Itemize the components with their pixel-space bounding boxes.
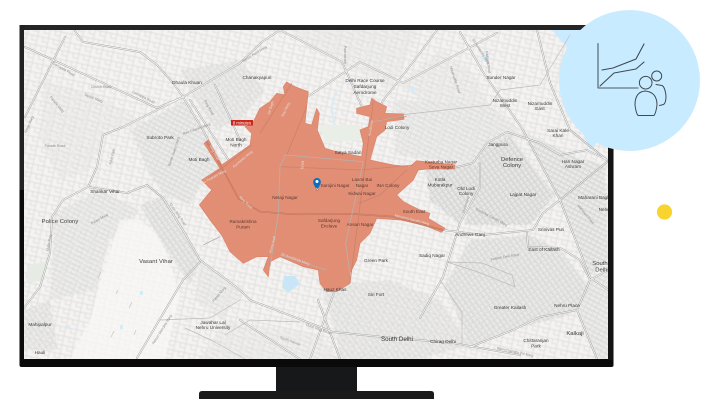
map place labels: Hauz Khas: [324, 287, 347, 292]
map place labels: Delhi: [595, 268, 609, 274]
map place labels: Enclave: [321, 224, 338, 228]
map place labels: Safdarjung: [318, 218, 341, 223]
map place labels: Bipin Chandra Pal Marg: [497, 346, 534, 358]
map base and street texture: [24, 30, 608, 359]
map place labels: Jangpura: [488, 142, 508, 147]
map place labels: Old Lodi: [457, 186, 475, 191]
water: pond: [282, 276, 300, 292]
isochrone road labels: Jor Bagh: [267, 101, 275, 115]
map place labels: Jawahar Lal: [200, 320, 226, 325]
map place labels: South Delhi: [381, 336, 413, 343]
map place labels: Maharani Bagh: [578, 195, 610, 200]
isochrone internal roads: [203, 83, 443, 283]
monitor bezel: [20, 25, 614, 367]
map place labels: Chirag Delhi: [430, 339, 456, 344]
people icon: [635, 71, 666, 116]
map place labels: Safdarjung: [354, 84, 377, 89]
isochrone road labels: [199, 101, 430, 266]
map place labels: Nizamuddin: [528, 101, 553, 106]
map place labels: Outer Ring: [45, 234, 53, 251]
isochrone road labels: Mahatma Gandhi Marg: [394, 213, 430, 226]
map place labels: Subroto Park: [146, 135, 174, 140]
map place labels: Nizamuddin Road: [449, 66, 461, 94]
map place labels: Palam Marg: [212, 286, 227, 303]
map place labels: Arjun Path: [108, 148, 116, 165]
isochrone: 8 minute service area: [199, 82, 455, 292]
map place labels: Kidwai Nagar: [348, 191, 376, 196]
map place labels: Srinivas Puri: [538, 227, 564, 232]
map place labels: Mathura Road: [484, 51, 492, 73]
map place labels: Outer Ring Road: [305, 323, 331, 335]
isochrone road labels: Rao Marg: [281, 102, 291, 117]
icon badge: chart and people: [559, 10, 700, 151]
map place labels: INA Colony: [377, 183, 400, 188]
map place labels: Kasturba Nagar: [425, 160, 458, 164]
map place labels: Outer Ring Road: [169, 203, 187, 226]
roads: [24, 30, 608, 359]
map place labels: Moolchand: [462, 196, 471, 213]
badge circle: [559, 10, 700, 151]
water: river: [552, 30, 596, 150]
map place labels: Andrews Ganj: [455, 232, 485, 237]
monitor: [20, 25, 614, 399]
map place labels: Laxmi Bai: [352, 177, 372, 182]
map place labels: Parade Road: [45, 144, 65, 148]
isochrone road labels: Aruna Asaf: [268, 236, 277, 253]
map place labels: Shankar Vihar: [90, 189, 120, 194]
map place labels: Chanakyapuri: [243, 75, 271, 80]
map place labels: Aerodrome: [353, 90, 377, 95]
isochrone road labels: Rao Tularam Marg: [199, 169, 227, 186]
map place labels: Sarojini Nagar: [320, 183, 350, 188]
map place labels: Dhaula Khuan: [172, 80, 202, 85]
map place labels: Nelson Mandela Marg: [151, 314, 173, 345]
map place labels: Sardar Patel Marg: [241, 45, 268, 63]
map place labels: Delhi Race Course: [345, 78, 385, 83]
map place labels: Green Park: [364, 258, 389, 263]
map place labels: Nizamuddin: [493, 98, 518, 103]
8 minutes label: 8 minutes: [233, 120, 251, 125]
map place labels: Ramakrishna: [229, 219, 257, 224]
map place labels: Maharani Road: [577, 204, 595, 225]
map place labels: East: [535, 106, 545, 111]
map place labels: Nehru: [599, 207, 612, 212]
map place labels: Ansari Nagar: [347, 222, 374, 227]
map place labels: Hari Nagar: [562, 159, 585, 164]
map place labels: Vasant Vihar: [139, 259, 173, 265]
monitor stand base: [199, 391, 434, 399]
map place labels: Netaji Nagar: [272, 195, 298, 200]
map place labels: Benito Juarez Marg: [167, 137, 181, 167]
map place labels: Khan: [553, 133, 564, 138]
map place labels: Kailash Devi Marg: [490, 253, 519, 261]
map place labels: Carriappa Road: [52, 61, 75, 77]
isochrone road labels: Sri Aurobindo Marg: [281, 252, 310, 266]
map place labels: Mubarakpur: [427, 182, 453, 188]
map place labels: Moti Bagh: [225, 137, 247, 142]
map place labels: South: [592, 261, 608, 267]
isochrone road labels: Ring Road: [238, 196, 253, 210]
map place labels: Greater Kailash: [494, 305, 527, 310]
map place labels: Colony: [459, 191, 474, 196]
map place labels: Sadiq Nagar: [419, 253, 445, 258]
map place labels: Sardar Marg: [84, 93, 103, 104]
map place labels: Lodi Colony: [385, 125, 410, 130]
map place labels: Nagar: [356, 183, 369, 188]
isochrone road labels: Aurobindo: [367, 120, 374, 136]
map place labels: Hauli: [35, 350, 45, 355]
map place labels: Sunder Nagar: [486, 75, 516, 80]
map place labels: Mahipalpur: [28, 322, 52, 327]
map place labels: Kasturba Gandhi Marg: [475, 207, 508, 227]
map place labels: Siri Fort: [368, 292, 385, 297]
map place labels: Carriappa Road: [132, 90, 155, 105]
map screen: [24, 30, 612, 359]
map place labels: Church Road: [91, 85, 111, 89]
map place labels: Defence: [501, 157, 524, 163]
map place labels: Puram: [236, 224, 250, 230]
map place labels: Moti Bagh: [188, 157, 210, 162]
map place labels: Ring Road: [203, 99, 215, 116]
map place labels: Sri Aurobindo Marg: [471, 38, 491, 65]
map place labels: Colony: [503, 163, 521, 169]
isochrone road labels: Aurobindo Marg: [232, 150, 254, 169]
map place labels: Nehru Place: [554, 303, 580, 308]
hillshade marks: [98, 272, 136, 337]
park: [318, 125, 360, 142]
map place labels: Satya Sadan: [335, 150, 362, 155]
map place labels: Kotla: [435, 177, 446, 182]
location pin: [313, 178, 321, 190]
map place labels: West: [500, 103, 511, 108]
map place labels: South East: [403, 209, 426, 214]
map place labels: South Avenue: [279, 335, 301, 347]
map place labels: Ashram: [565, 164, 581, 169]
map place labels: North: [230, 142, 242, 148]
map place labels: Seva Nagar: [429, 164, 454, 170]
map place labels: Police Colony: [42, 219, 78, 225]
map place labels: Palam Marg: [90, 213, 109, 226]
map place labels: [24, 38, 612, 358]
decorative yellow dot: [657, 204, 672, 220]
map place labels: Parade Marg: [49, 95, 65, 113]
map place labels: Chittaranjan: [523, 338, 549, 343]
monitor stand neck: [276, 367, 357, 392]
map place labels: Rao Tularam Marg: [182, 122, 211, 136]
map place labels: Park: [531, 344, 541, 348]
map place labels: Panchsheel: [343, 46, 347, 64]
map place labels: Kalkaji: [566, 331, 584, 337]
isochrone road labels: Ring Road: [208, 145, 220, 161]
isochrone road labels: Marg: [301, 161, 305, 169]
map place labels: East of Kailash: [528, 247, 560, 252]
map place labels: Lajpat Nagar: [510, 192, 537, 197]
chart icon: [598, 44, 644, 88]
map place labels: Nehru University: [196, 325, 231, 330]
map place labels: Sarai Kale: [547, 128, 569, 133]
map place labels: Ridge Marg: [24, 115, 35, 134]
